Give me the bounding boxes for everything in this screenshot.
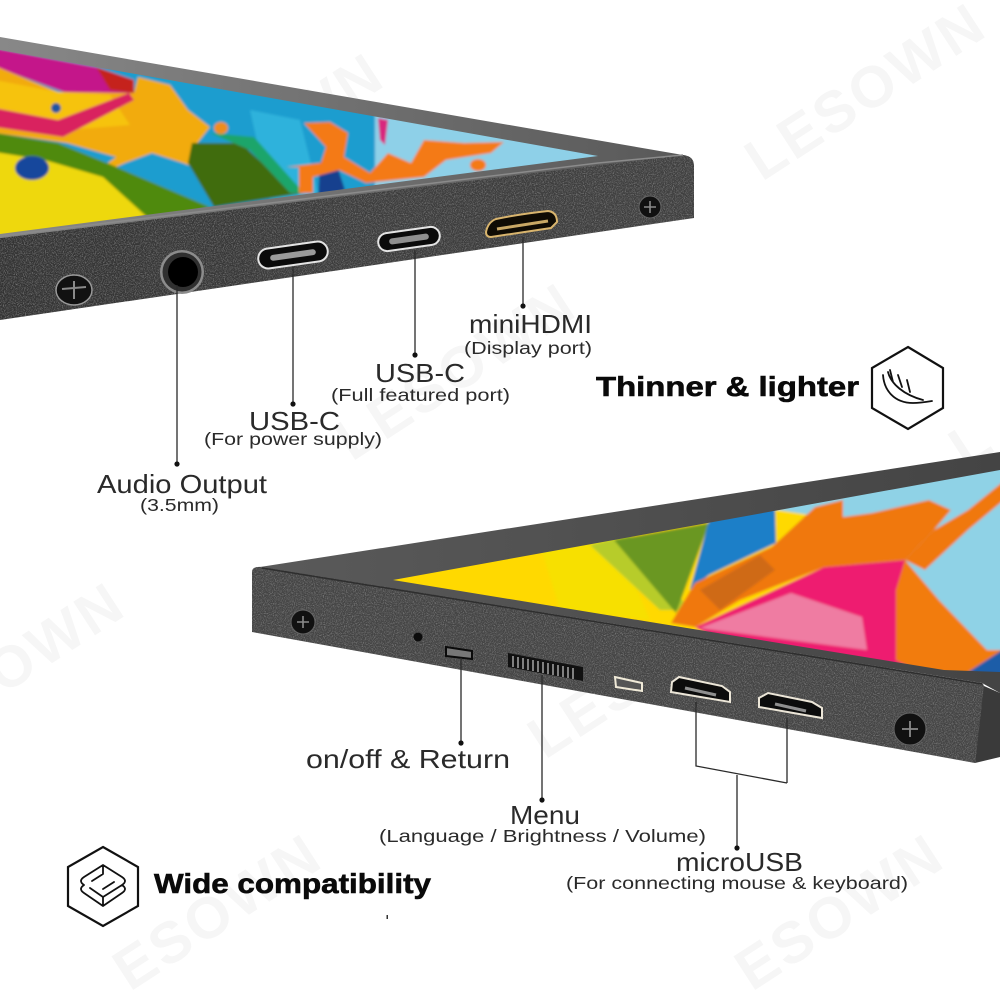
label: microUSB: (For connecting mouse & keyboard) bbox=[566, 873, 908, 893]
heading: thinner and lighter: Thinner & lighter bbox=[596, 371, 859, 402]
right screw bbox=[894, 713, 926, 745]
right screw bbox=[639, 196, 661, 218]
small stray mark bbox=[386, 915, 388, 919]
leader lines bottom bbox=[458, 658, 787, 851]
label: microUSB: microUSB bbox=[676, 847, 803, 877]
watermarks: LESOWN bbox=[132, 40, 396, 243]
watermarks: LESOWN bbox=[324, 270, 588, 473]
top monitor front face bbox=[0, 155, 694, 320]
label: audio output bbox=[97, 469, 268, 515]
label: audio output: Audio Output bbox=[97, 469, 268, 499]
indicator light bbox=[414, 632, 422, 642]
bottom monitor bezel bbox=[260, 452, 1000, 693]
icon: leaf hexagon bbox=[872, 347, 943, 429]
top monitor screen artwork bbox=[0, 50, 598, 234]
label: on/off and return: on/off & Return bbox=[306, 744, 510, 774]
menu wheel bbox=[508, 653, 583, 681]
micro HDMI port 2 bbox=[759, 693, 822, 718]
bottom monitor bbox=[252, 452, 1000, 763]
label: USB-C full featured: USB-C bbox=[375, 358, 465, 388]
label: menu: Menu bbox=[510, 800, 580, 830]
heading: wide compatibility: Wide compatibility bbox=[154, 868, 431, 899]
bottom monitor side return bbox=[975, 686, 1000, 763]
label: menu bbox=[379, 800, 706, 846]
label: miniHDMI bbox=[464, 309, 592, 358]
bottom monitor screen artwork bbox=[393, 470, 1000, 672]
label: menu: (Language / Brightness / Volume) bbox=[379, 826, 706, 846]
power button bbox=[446, 647, 472, 659]
micro HDMI port 1 bbox=[671, 677, 730, 702]
top edge highlight bbox=[0, 155, 683, 236]
label: audio output: (3.5mm) bbox=[140, 495, 219, 515]
label: USB-C full featured bbox=[331, 358, 510, 405]
USB-C power port bbox=[257, 240, 329, 270]
label: USB-C power: (For power supply) bbox=[204, 429, 382, 449]
miniHDMI port bbox=[486, 211, 557, 237]
label: microUSB bbox=[566, 847, 908, 893]
top monitor bezel bbox=[0, 37, 694, 238]
left screw bbox=[291, 610, 315, 634]
label: miniHDMI: miniHDMI bbox=[469, 309, 592, 339]
audio jack bbox=[160, 250, 204, 294]
small port bbox=[615, 677, 642, 691]
watermarks: ESOWN bbox=[724, 821, 955, 1000]
USB-C full featured port bbox=[377, 226, 441, 252]
watermarks: LESOWN bbox=[517, 568, 781, 771]
left screw bbox=[56, 275, 92, 305]
icon: layers hexagon bbox=[68, 847, 138, 926]
label: USB-C power bbox=[204, 406, 382, 449]
top monitor bbox=[0, 37, 694, 320]
label: miniHDMI: (Display port) bbox=[464, 338, 592, 358]
label: USB-C power: USB-C bbox=[249, 406, 340, 436]
bottom monitor front face bbox=[252, 567, 984, 763]
front top dark edge bbox=[262, 568, 982, 684]
watermarks: ESOWN bbox=[102, 821, 333, 1000]
label: USB-C full featured: (Full featured port) bbox=[331, 385, 510, 405]
leader lines top bbox=[174, 237, 526, 467]
